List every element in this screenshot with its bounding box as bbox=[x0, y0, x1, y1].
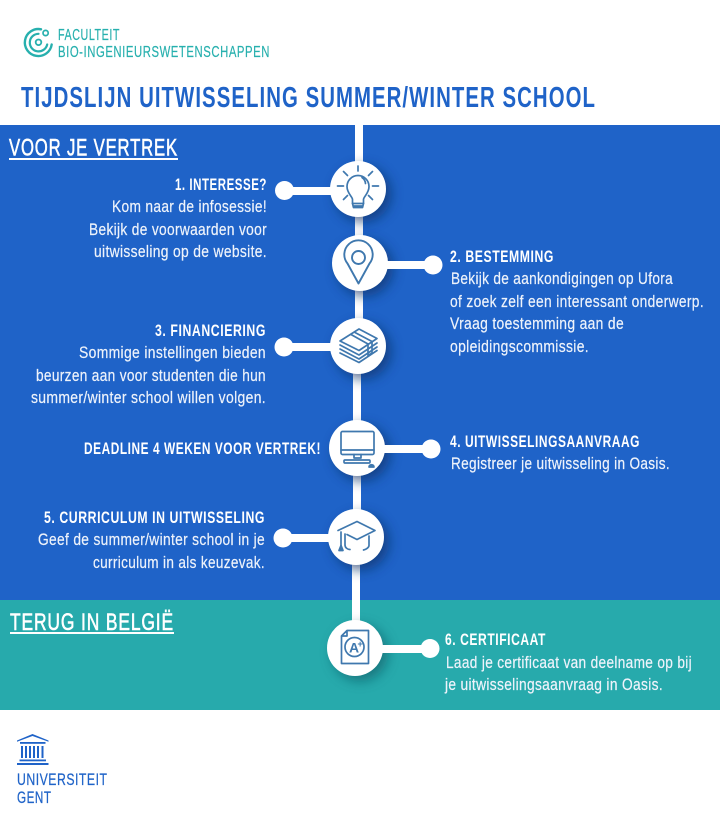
panel: voor je vertrek bbox=[0, 125, 720, 600]
text block: step 5: Geef de summer/winter school in je bbox=[38, 531, 265, 549]
step 2 marker and icon: map pin bbox=[332, 235, 442, 296]
text block: step 1 bbox=[89, 175, 267, 261]
text block: step 2 bbox=[450, 247, 704, 356]
step 4 marker and icon: computer bbox=[329, 420, 440, 481]
text block: step 4 bbox=[450, 432, 670, 473]
text block: step 6 bbox=[444, 630, 692, 694]
text block: step 6: je uitwisselingsaanvraag in Oasis. bbox=[444, 676, 663, 694]
text block: step 1: Bekijk de voorwaarden voor bbox=[89, 221, 267, 239]
step 6 marker and icon: certificate: A bbox=[349, 640, 359, 656]
university logo bbox=[17, 734, 108, 807]
step 1 marker and icon: light bulb bbox=[275, 161, 391, 222]
text block: step 1: Kom naar de infosessie! bbox=[112, 198, 267, 216]
text block: step 1: uitwisseling op de website. bbox=[94, 243, 267, 261]
icon: university building bbox=[17, 734, 48, 765]
university name: UNIVERSITEIT bbox=[17, 770, 108, 789]
text block: step 3: summer/winter school willen volgen. bbox=[31, 389, 266, 407]
text block: step 2: Vraag toestemming aan de bbox=[450, 315, 624, 333]
text block: step 5: curriculum in als keuzevak. bbox=[93, 554, 265, 572]
deadline text: DEADLINE 4 WEKEN VOOR VERTREK! bbox=[84, 439, 321, 458]
heading: terug in belgie: TERUG IN BELGIË bbox=[10, 609, 174, 636]
text block: step 4: Registreer je uitwisseling in Oasis. bbox=[451, 455, 670, 473]
text block: step 2: 2. BESTEMMING bbox=[450, 247, 554, 266]
university name: GENT bbox=[17, 788, 52, 807]
faculty name bbox=[58, 27, 270, 61]
panel: terug in belgie bbox=[0, 600, 720, 710]
step 5 marker and icon: graduation cap bbox=[274, 509, 389, 570]
text block: step 5 bbox=[38, 508, 265, 572]
icon: faculty emblem bbox=[25, 29, 52, 56]
text block: step 3 bbox=[31, 321, 266, 407]
text block: step 3: 3. FINANCIERING bbox=[155, 321, 266, 340]
step 6 marker and icon: certificate: + bbox=[358, 639, 363, 649]
step 6 marker and icon: certificate bbox=[327, 620, 440, 681]
faculty name: BIO-INGENIEURSWETENSCHAPPEN bbox=[58, 44, 270, 61]
university name bbox=[17, 770, 108, 807]
faculty logo bbox=[25, 27, 270, 61]
text block: step 2: opleidingscommissie. bbox=[450, 338, 589, 356]
text block: step 1: 1. INTERESSE? bbox=[175, 175, 267, 194]
text block: step 4: 4. UITWISSELINGSAANVRAAG bbox=[450, 432, 640, 451]
timeline line bbox=[352, 125, 363, 630]
step 3 marker and icon: stack of money bbox=[274, 318, 391, 379]
text block: step 6: 6. CERTIFICAAT bbox=[445, 630, 546, 649]
text block: step 5: 5. CURRICULUM IN UITWISSELING bbox=[44, 508, 265, 527]
faculty name: FACULTEIT bbox=[58, 27, 120, 44]
heading: voor je vertrek: VOOR JE VERTREK bbox=[9, 134, 178, 162]
text block: step 2: Bekijk de aankondigingen op Ufora bbox=[451, 270, 673, 288]
text block: step 3: Sommige instellingen bieden bbox=[79, 344, 266, 362]
text block: step 3: beurzen aan voor studenten die hun bbox=[36, 367, 266, 385]
